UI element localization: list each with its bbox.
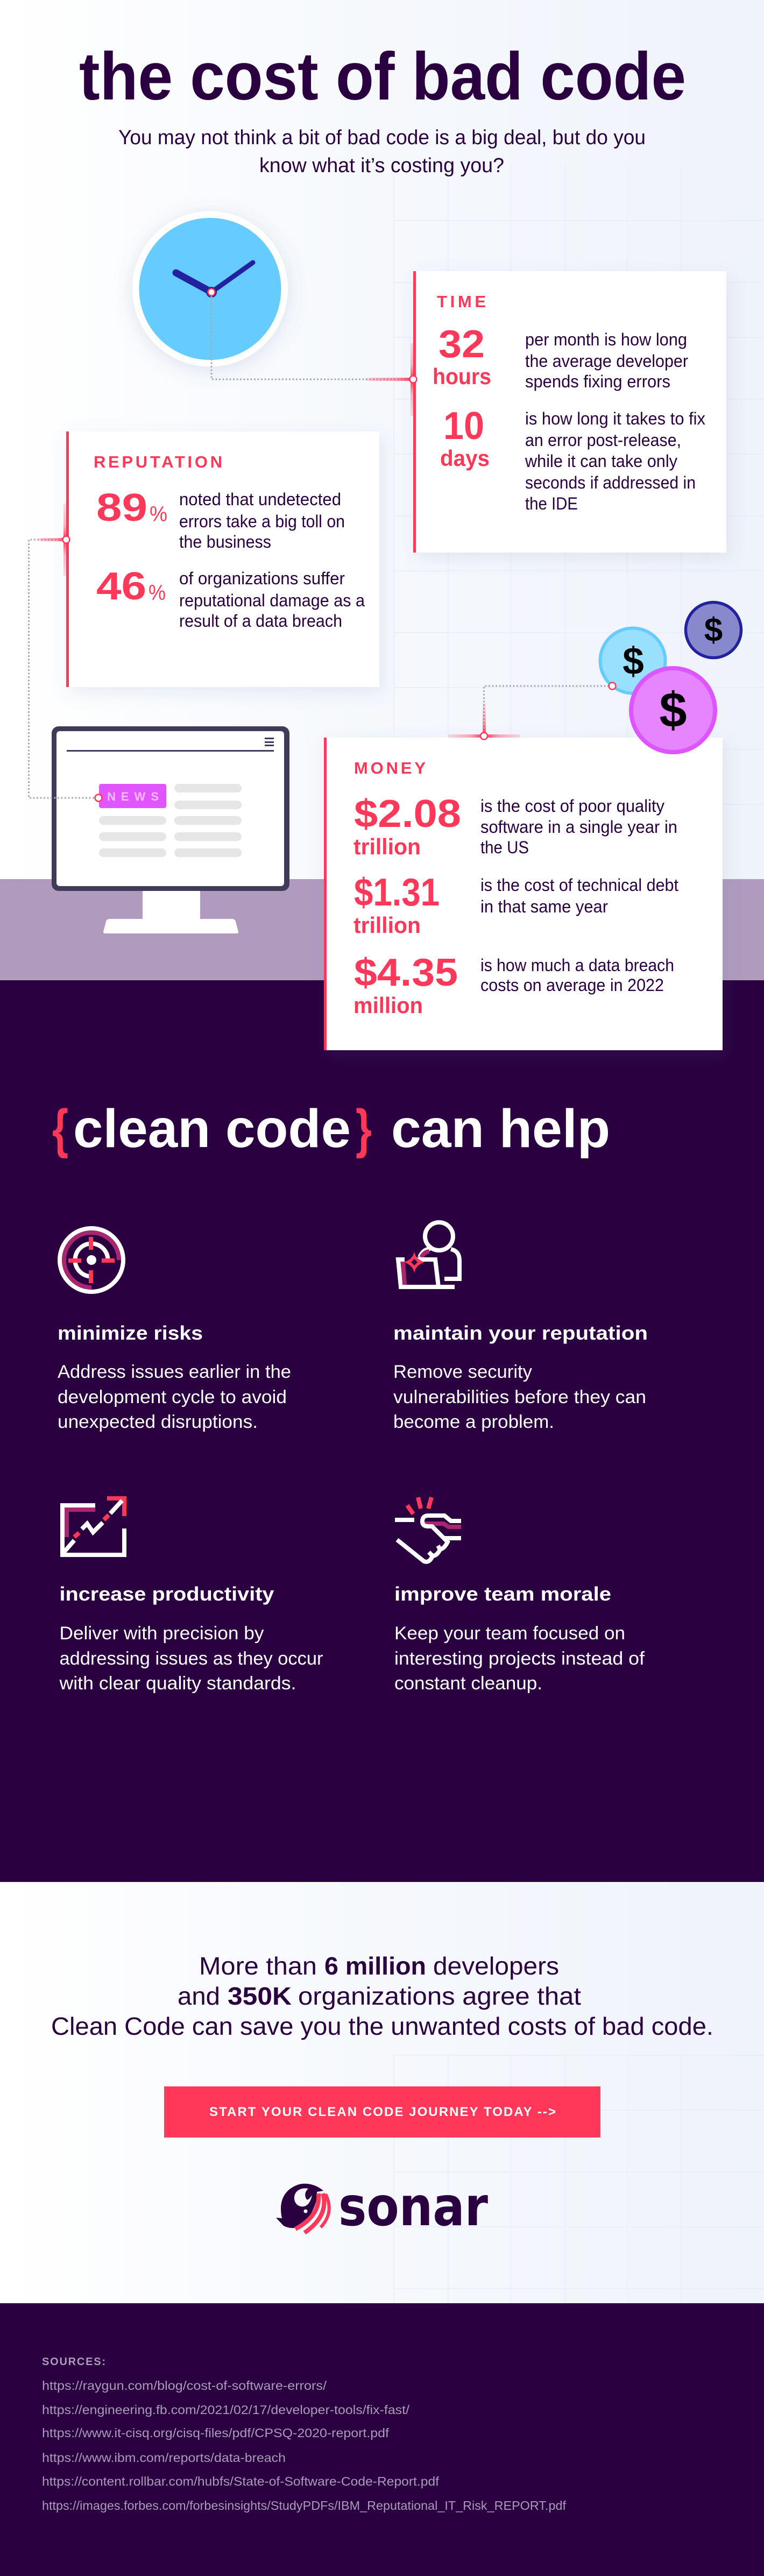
background: top section <box>0 0 764 879</box>
benefit: improve team morale <box>394 1497 645 1694</box>
closing statement: 350K <box>228 1982 292 2010</box>
description: development cycle to avoid <box>58 1387 287 1407</box>
stat: 4.35 million: $4.35 <box>354 951 458 994</box>
benefit: maintain your reputation <box>393 1222 648 1432</box>
connector: clock to time <box>208 288 416 416</box>
heading: clean code can help: } <box>356 1099 372 1159</box>
text: 4.35 million <box>480 956 674 995</box>
panel: money <box>324 738 723 1050</box>
description: with clear quality standards. <box>59 1673 296 1694</box>
heading: maintain your reputation <box>393 1322 648 1344</box>
closing statement: developers <box>433 1952 559 1980</box>
sources list: https://raygun.com/blog/cost-of-software-errors/ <box>42 2379 327 2393</box>
stat: 89 percent <box>96 486 167 529</box>
icon: person with laptop <box>398 1222 459 1287</box>
sources heading: SOURCES: <box>42 2356 105 2368</box>
sources list <box>42 2379 567 2513</box>
text: 46 percent: result of a data breach <box>179 611 342 631</box>
intro text <box>118 126 646 177</box>
closing statement: 6 million <box>324 1952 426 1980</box>
coin: blue <box>600 628 665 693</box>
stat: 89 percent: 89 <box>96 486 147 529</box>
news tag <box>99 784 166 808</box>
text: 89 percent <box>179 490 345 551</box>
icon: target <box>60 1228 123 1292</box>
coin: navy <box>685 603 741 657</box>
text: 10 days <box>525 409 705 513</box>
text: 10 days: the IDE <box>525 494 578 513</box>
benefit: minimize risks <box>58 1228 291 1432</box>
heading: improve team morale <box>394 1583 611 1605</box>
text: 46 percent: of organizations suffer <box>179 569 345 588</box>
text: 2.08 trillion <box>480 796 677 857</box>
text: 2.08 trillion: is the cost of poor quality <box>480 796 664 816</box>
heading: clean code can help <box>52 1099 610 1159</box>
description <box>394 1623 645 1694</box>
background grid: top <box>394 166 764 879</box>
stat: 10 days: 10 <box>443 405 484 448</box>
icon: coins <box>600 603 741 752</box>
stat: 1.31 trillion: trillion <box>353 912 421 938</box>
stat: 10 days: days <box>440 445 490 471</box>
stat: 10 days <box>440 405 490 471</box>
description: constant cleanup. <box>394 1673 542 1694</box>
text: 32 hours <box>525 330 688 391</box>
closing statement: and <box>178 1982 220 2010</box>
logo: sonar <box>276 2175 489 2238</box>
stat: 46 percent: % <box>148 581 166 605</box>
heading: money: MONEY <box>354 759 426 777</box>
description: addressing issues as they occur <box>59 1648 323 1669</box>
coin: magenta <box>631 668 715 752</box>
text: 4.35 million: costs on average in 2022 <box>480 975 664 995</box>
sources list: https://content.rollbar.com/hubfs/State-of-Software-Code-Report.pdf <box>42 2474 440 2488</box>
intro text: You may not think a bit of bad code is a big deal, but do you <box>118 126 646 149</box>
background grid: bottom <box>394 2055 764 2303</box>
text: 10 days: is how long it takes to fix <box>525 409 705 428</box>
text: 10 days: seconds if addressed in <box>525 473 696 492</box>
stat: 4.35 million: million <box>353 993 423 1018</box>
description: Keep your team focused on <box>394 1623 625 1644</box>
panel: time <box>413 271 726 553</box>
icon: handshake <box>395 1497 461 1562</box>
sources list: https://images.forbes.com/forbesinsights/StudyPDFs/IBM_Reputational_IT_Risk_REPORT.pdf <box>42 2499 567 2513</box>
sources <box>42 2356 567 2513</box>
description: interesting projects instead of <box>394 1648 645 1669</box>
description: become a problem. <box>393 1412 554 1432</box>
news tag: NEWS <box>107 790 159 803</box>
closing statement: More than <box>199 1952 317 1980</box>
text: 32 hours: spends fixing errors <box>525 372 670 391</box>
sources list: https://www.ibm.com/reports/data-breach <box>42 2451 286 2465</box>
stat: 46 percent <box>96 565 166 608</box>
text: 89 percent: the business <box>179 532 271 551</box>
stat: 2.08 trillion: $2.08 <box>354 792 461 836</box>
background: sources section <box>0 2303 764 2576</box>
text: 1.31 trillion: in that same year <box>480 897 608 916</box>
logo wordmark: sonar <box>338 2175 489 2238</box>
description <box>59 1623 323 1694</box>
description: Deliver with precision by <box>59 1623 264 1644</box>
stat: 1.31 trillion <box>353 871 440 938</box>
heading: clean code can help: { <box>52 1099 68 1159</box>
coin: navy: $ <box>704 612 723 649</box>
stat: 1.31 trillion: $1.31 <box>354 871 440 914</box>
closing statement: Clean Code can save you the unwanted costs of bad code. <box>51 2012 713 2040</box>
text: 32 hours: per month is how long <box>525 330 687 349</box>
description <box>58 1362 291 1432</box>
logo mark <box>276 2184 329 2233</box>
coin: magenta: $ <box>659 683 687 738</box>
text: 89 percent: noted that undetected <box>179 490 341 509</box>
icon: monitor <box>52 726 289 933</box>
stat: 32 hours: 32 <box>438 323 485 366</box>
connector: coins to money <box>448 682 616 739</box>
heading: time: TIME <box>437 292 486 311</box>
stat: 4.35 million <box>353 951 458 1018</box>
sources list: https://www.it-cisq.org/cisq-files/pdf/CPSQ-2020-report.pdf <box>42 2426 390 2440</box>
stat: 32 hours <box>433 323 491 389</box>
text: 89 percent: errors take a big toll on <box>179 512 345 531</box>
sources list: https://engineering.fb.com/2021/02/17/developer-tools/fix-fast/ <box>42 2403 410 2417</box>
stat: 32 hours: hours <box>433 364 491 389</box>
text: 2.08 trillion: software in a single year in <box>480 817 677 837</box>
description: Remove security <box>393 1362 532 1382</box>
icon: growth chart <box>62 1498 124 1555</box>
description: Address issues earlier in the <box>58 1362 291 1382</box>
description: vulnerabilities before they can <box>393 1387 646 1407</box>
description <box>393 1362 646 1432</box>
button: call to action <box>164 2086 600 2138</box>
text: 46 percent <box>179 569 365 631</box>
heading: increase productivity <box>59 1583 274 1605</box>
button: call to action: START YOUR CLEAN CODE JOURNEY TODAY --> <box>209 2105 556 2119</box>
title: the cost of bad code <box>79 39 686 114</box>
text: 4.35 million: is how much a data breach <box>480 956 674 975</box>
text: 10 days: while it can take only <box>525 451 677 471</box>
text: 46 percent: reputational damage as a <box>179 591 365 610</box>
benefit: increase productivity <box>59 1498 323 1694</box>
text: 10 days: an error post-release, <box>525 430 681 450</box>
icon: clock <box>132 211 288 367</box>
intro text: know what it’s costing you? <box>259 154 504 177</box>
heading: clean code can help: can help <box>391 1099 610 1159</box>
stat: 2.08 trillion: trillion <box>353 834 421 859</box>
text: 1.31 trillion <box>480 875 678 916</box>
panel: reputation <box>66 431 379 687</box>
closing statement: organizations agree that <box>298 1982 581 2010</box>
stat: 89 percent: % <box>150 503 167 526</box>
background: call to action section <box>0 1882 764 2303</box>
text: 2.08 trillion: the US <box>480 838 529 857</box>
text: 32 hours: the average developer <box>525 351 688 371</box>
purple floor band <box>0 879 764 980</box>
heading: minimize risks <box>58 1322 203 1344</box>
stat: 46 percent: 46 <box>96 565 146 608</box>
coin: blue: $ <box>622 640 644 683</box>
description: unexpected disruptions. <box>58 1412 258 1432</box>
heading: clean code can help: clean code <box>73 1099 351 1159</box>
connector: reputation to news <box>29 504 102 802</box>
background: dark section <box>0 980 764 1882</box>
stat: 2.08 trillion <box>353 792 461 859</box>
text: 1.31 trillion: is the cost of technical debt <box>480 875 678 895</box>
heading: reputation: REPUTATION <box>94 452 222 471</box>
closing statement <box>51 1952 713 2040</box>
